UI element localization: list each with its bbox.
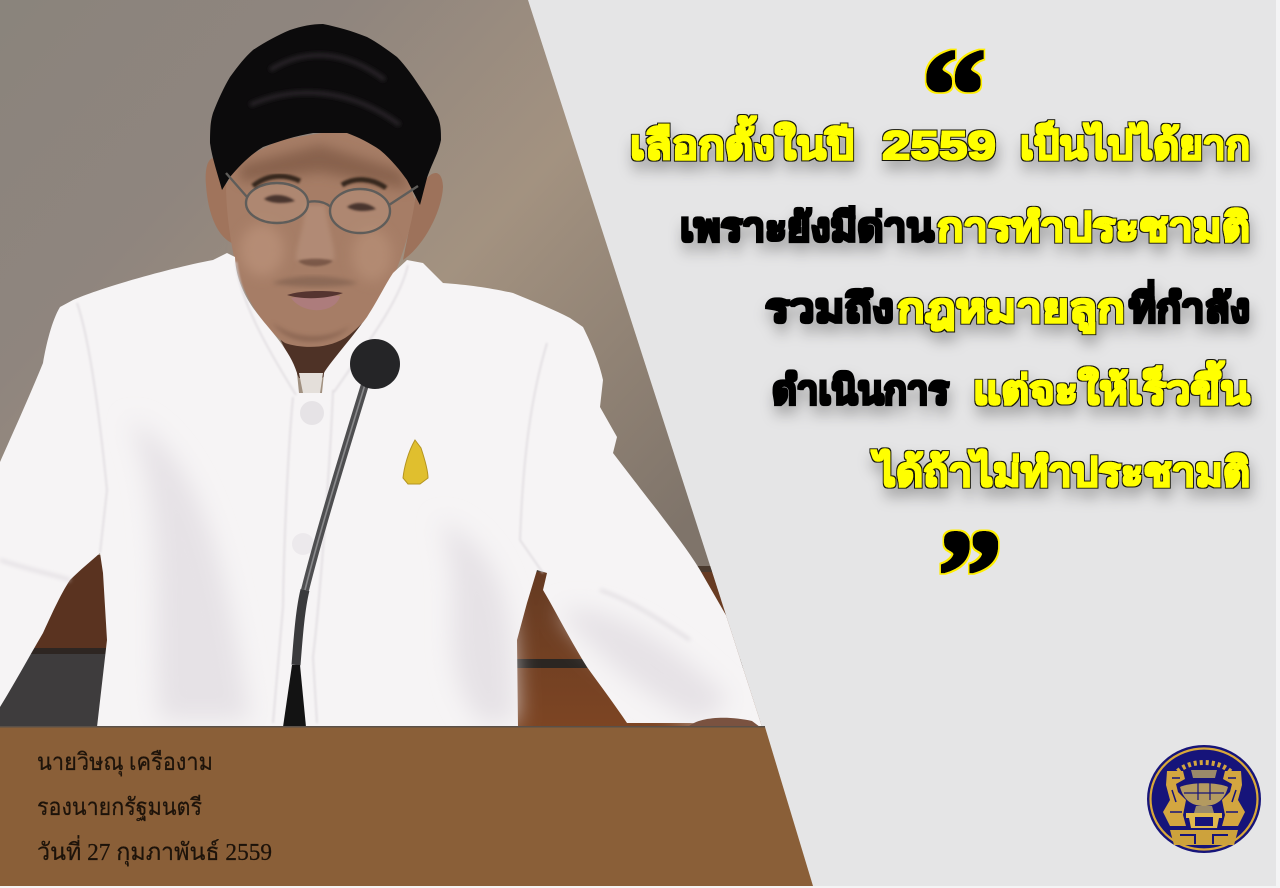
quote line 3: ที่กำลัง: [1129, 280, 1250, 331]
seal base: [1170, 830, 1238, 845]
white jacket: [0, 253, 763, 727]
photo: speaker at the podium: [0, 0, 780, 730]
photo backdrop wall: [0, 0, 780, 600]
date: วันที่ 27 กุมภาพันธ์ 2559: [37, 835, 272, 867]
quote line 4: แต่จะให้เร็วขึ้น: [973, 361, 1250, 413]
jacket soft shading: [130, 420, 730, 722]
seal table: [1186, 813, 1222, 828]
quote line 5: ได้ถ้าไม่ทำประชามติ: [871, 449, 1250, 495]
speaker name: นายวิษณุ เครืองาม: [37, 749, 213, 777]
seal right lion: [1222, 771, 1245, 826]
quote text: [630, 116, 1250, 495]
quote line 1: เลือกตั้งในปี: [630, 116, 854, 168]
seal left lion: [1163, 771, 1186, 826]
face: [226, 130, 415, 347]
quote line 3: รวมถึง: [765, 287, 894, 331]
speaker position: รองนายกรัฐมนตรี: [37, 794, 202, 821]
eyes: [264, 195, 376, 211]
left ear: [206, 158, 234, 244]
caption band: [0, 726, 813, 886]
icon: government seal: [1147, 745, 1261, 853]
undershirt: [299, 373, 323, 393]
quote line 1: [630, 116, 1250, 168]
wood panelling: [0, 555, 780, 730]
jacket seams: [77, 262, 547, 723]
quote line 3: กฎหมายลูก: [897, 287, 1125, 333]
gold lapel pin: [403, 440, 428, 484]
right ear: [403, 173, 443, 260]
jacket button lower: [292, 533, 314, 555]
hair: [210, 24, 441, 205]
seal bowl: [1180, 770, 1228, 813]
closing quote mark: ”: [938, 504, 1002, 648]
opening quote mark: “: [922, 23, 986, 167]
jacket button upper: [300, 401, 324, 425]
quote line 3: [765, 280, 1250, 333]
microphone: [283, 339, 400, 727]
quote line 2: เพราะยังมีด่าน: [680, 206, 934, 250]
right hand on podium: [690, 718, 758, 726]
eyebrows: [253, 176, 386, 188]
mouth: [287, 291, 343, 310]
quote line 2: [680, 206, 1250, 250]
quote line 4: ดำเนินการ: [772, 369, 949, 413]
quote line 1: 2559: [882, 124, 996, 168]
seal top garland: [1174, 762, 1234, 776]
quote line 2: การทำประชามติ: [937, 206, 1250, 250]
face shading: [240, 145, 410, 342]
neck: [280, 323, 362, 378]
quote line 1: เป็นไปได้ยาก: [1020, 120, 1250, 168]
quote line 4: [772, 361, 1250, 413]
glasses: [226, 173, 418, 233]
